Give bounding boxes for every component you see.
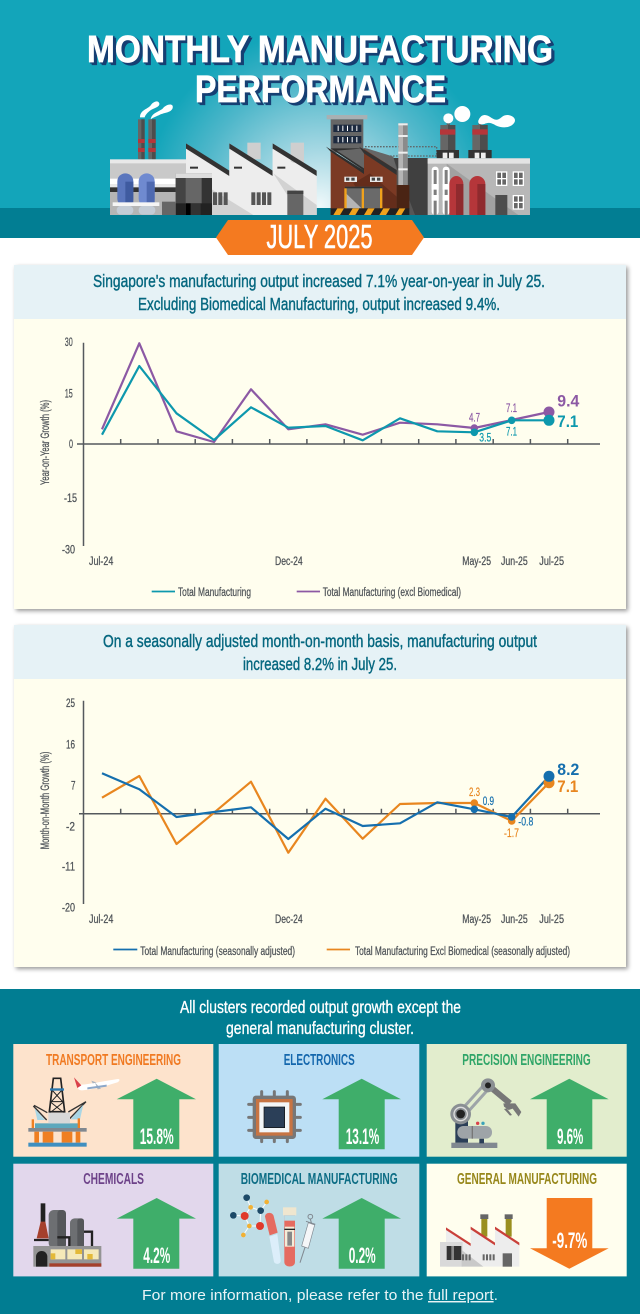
icon: oil rig and plane: [28, 1077, 119, 1147]
date banner: JULY 2025: [266, 218, 372, 255]
line chart: year-on-year: Year-on-Year Growth (%): [40, 400, 52, 485]
line chart: year-on-year: -30: [62, 544, 75, 556]
arrow: up 15.8%: 15.8%: [140, 1124, 174, 1149]
panel: clusters section: [0, 989, 640, 1314]
line chart: month-on-month: [40, 698, 600, 926]
panel heading: month-on-month: [14, 625, 626, 679]
line chart: year-on-year: 30: [65, 337, 73, 349]
line chart: year-on-year: [40, 337, 600, 568]
panel: month-on-month growth: [14, 625, 626, 967]
line chart: year-on-year: 7.1: [506, 427, 517, 439]
line chart: year-on-year: 3.5: [479, 432, 491, 444]
panel heading: year-on-year: Excluding Biomedical Manufacturing, output increased 9.4%.: [138, 294, 500, 314]
line chart: month-on-month: 7.1: [557, 777, 578, 796]
line chart: month-on-month: 0.9: [483, 796, 494, 808]
line chart: month-on-month: -0.8: [518, 816, 533, 828]
card: electronics: ELECTRONICS: [284, 1052, 355, 1069]
title: MONTHLY MANUFACTURING: [90, 32, 556, 74]
card: chemicals: [13, 1164, 213, 1276]
line chart: month-on-month: May-25: [462, 914, 491, 926]
line chart: year-on-year: 0: [69, 439, 73, 451]
line chart: month-on-month: -20: [62, 902, 75, 914]
card: transport engineering: [13, 1044, 213, 1157]
line chart: year-on-year: Jul-25: [539, 556, 564, 568]
arrow: up 13.1%: [322, 1079, 401, 1149]
line chart: year-on-year: 4.7: [469, 412, 480, 424]
panel heading: month-on-month: On a seasonally adjusted month-on-month basis, manufacturing output: [103, 631, 537, 651]
line chart: year-on-year: 9.4: [557, 392, 580, 410]
card: chemicals: CHEMICALS: [83, 1171, 144, 1188]
line chart: month-on-month: -2: [66, 822, 75, 834]
title: MONTHLY MANUFACTURING: [87, 29, 553, 71]
line chart: year-on-year: Jul-24: [89, 556, 114, 568]
line chart: month-on-month: 2.3: [469, 787, 480, 799]
title: PERFORMANCE: [198, 72, 449, 114]
card: general manufacturing: [427, 1164, 627, 1276]
legend: year-on-year: Total Manufacturing: [178, 587, 251, 599]
line chart: month-on-month: 25: [66, 698, 75, 710]
panel heading: year-on-year: [14, 265, 626, 319]
icon: right factory: [326, 106, 530, 215]
arrow: up 4.2%: [117, 1198, 196, 1269]
icon: molecules, dropper and test tube: [230, 1194, 315, 1266]
icon: microchip: [249, 1092, 300, 1142]
clusters heading: [180, 997, 461, 1038]
legend: year-on-year: [152, 587, 461, 599]
line chart: month-on-month: 16: [66, 740, 75, 752]
legend: month-on-month: Total Manufacturing (seasonally adjusted): [140, 946, 295, 958]
line chart: month-on-month: -11: [62, 862, 75, 874]
icon: left factory: [110, 101, 317, 215]
footer note: For more information, please refer to the full report .: [142, 1288, 498, 1304]
line chart: month-on-month: Jul-24: [89, 914, 114, 926]
panel heading: month-on-month: increased 8.2% in July 25.: [243, 654, 397, 674]
clusters heading: All clusters recorded output growth except the: [180, 997, 461, 1017]
icon: chemical plant: [33, 1203, 101, 1267]
arrow: up 13.1%: 13.1%: [346, 1124, 379, 1149]
arrow: up 9.6%: 9.6%: [557, 1124, 583, 1149]
line chart: year-on-year: May-25: [462, 556, 491, 568]
arrow: up 0.2%: [322, 1198, 401, 1269]
line chart: month-on-month: Jul-25: [539, 914, 564, 926]
line chart: year-on-year: 15: [65, 388, 73, 400]
line chart: month-on-month: Jun-25: [501, 914, 528, 926]
line chart: month-on-month: Dec-24: [275, 914, 303, 926]
card: biomedical manufacturing: BIOMEDICAL MANUFACTURING: [241, 1171, 398, 1188]
panel: year-on-year growth: [14, 265, 626, 609]
legend: month-on-month: [113, 946, 570, 958]
card: electronics: [219, 1044, 419, 1157]
arrow: up 0.2%: 0.2%: [349, 1243, 376, 1268]
arrow: down -9.7%: [530, 1198, 609, 1269]
card: precision engineering: [427, 1044, 627, 1157]
title: [87, 29, 556, 114]
arrow: up 15.8%: [117, 1079, 196, 1149]
card: biomedical manufacturing: [219, 1164, 419, 1276]
title: PERFORMANCE: [195, 69, 446, 111]
line chart: month-on-month: Month-on-Month Growth (%): [40, 752, 52, 849]
line chart: year-on-year: Dec-24: [275, 556, 303, 568]
line chart: month-on-month: 8.2: [557, 760, 579, 779]
line chart: year-on-year: -15: [64, 493, 77, 505]
line chart: month-on-month: -1.7: [504, 828, 519, 840]
card: transport engineering: TRANSPORT ENGINEERING: [46, 1052, 181, 1069]
line chart: year-on-year: 7.1: [506, 403, 517, 415]
arrow: up 9.6%: [530, 1079, 609, 1149]
icon: robot arm: [450, 1078, 521, 1148]
title: PERFORMANCE: [196, 70, 448, 112]
icon: small factory: [440, 1214, 519, 1267]
arrow: up 4.2%: 4.2%: [143, 1243, 170, 1268]
line chart: month-on-month: 7: [71, 781, 76, 793]
line chart: year-on-year: 7.1: [557, 412, 578, 431]
title: MONTHLY MANUFACTURING: [88, 30, 554, 72]
legend: year-on-year: Total Manufacturing (excl Biomedical): [323, 587, 461, 599]
arrow: down -9.7%: -9.7%: [552, 1228, 587, 1253]
clusters heading: general manufacturing cluster.: [226, 1018, 414, 1038]
header banner: [0, 0, 640, 238]
line chart: year-on-year: Jun-25: [501, 556, 528, 568]
